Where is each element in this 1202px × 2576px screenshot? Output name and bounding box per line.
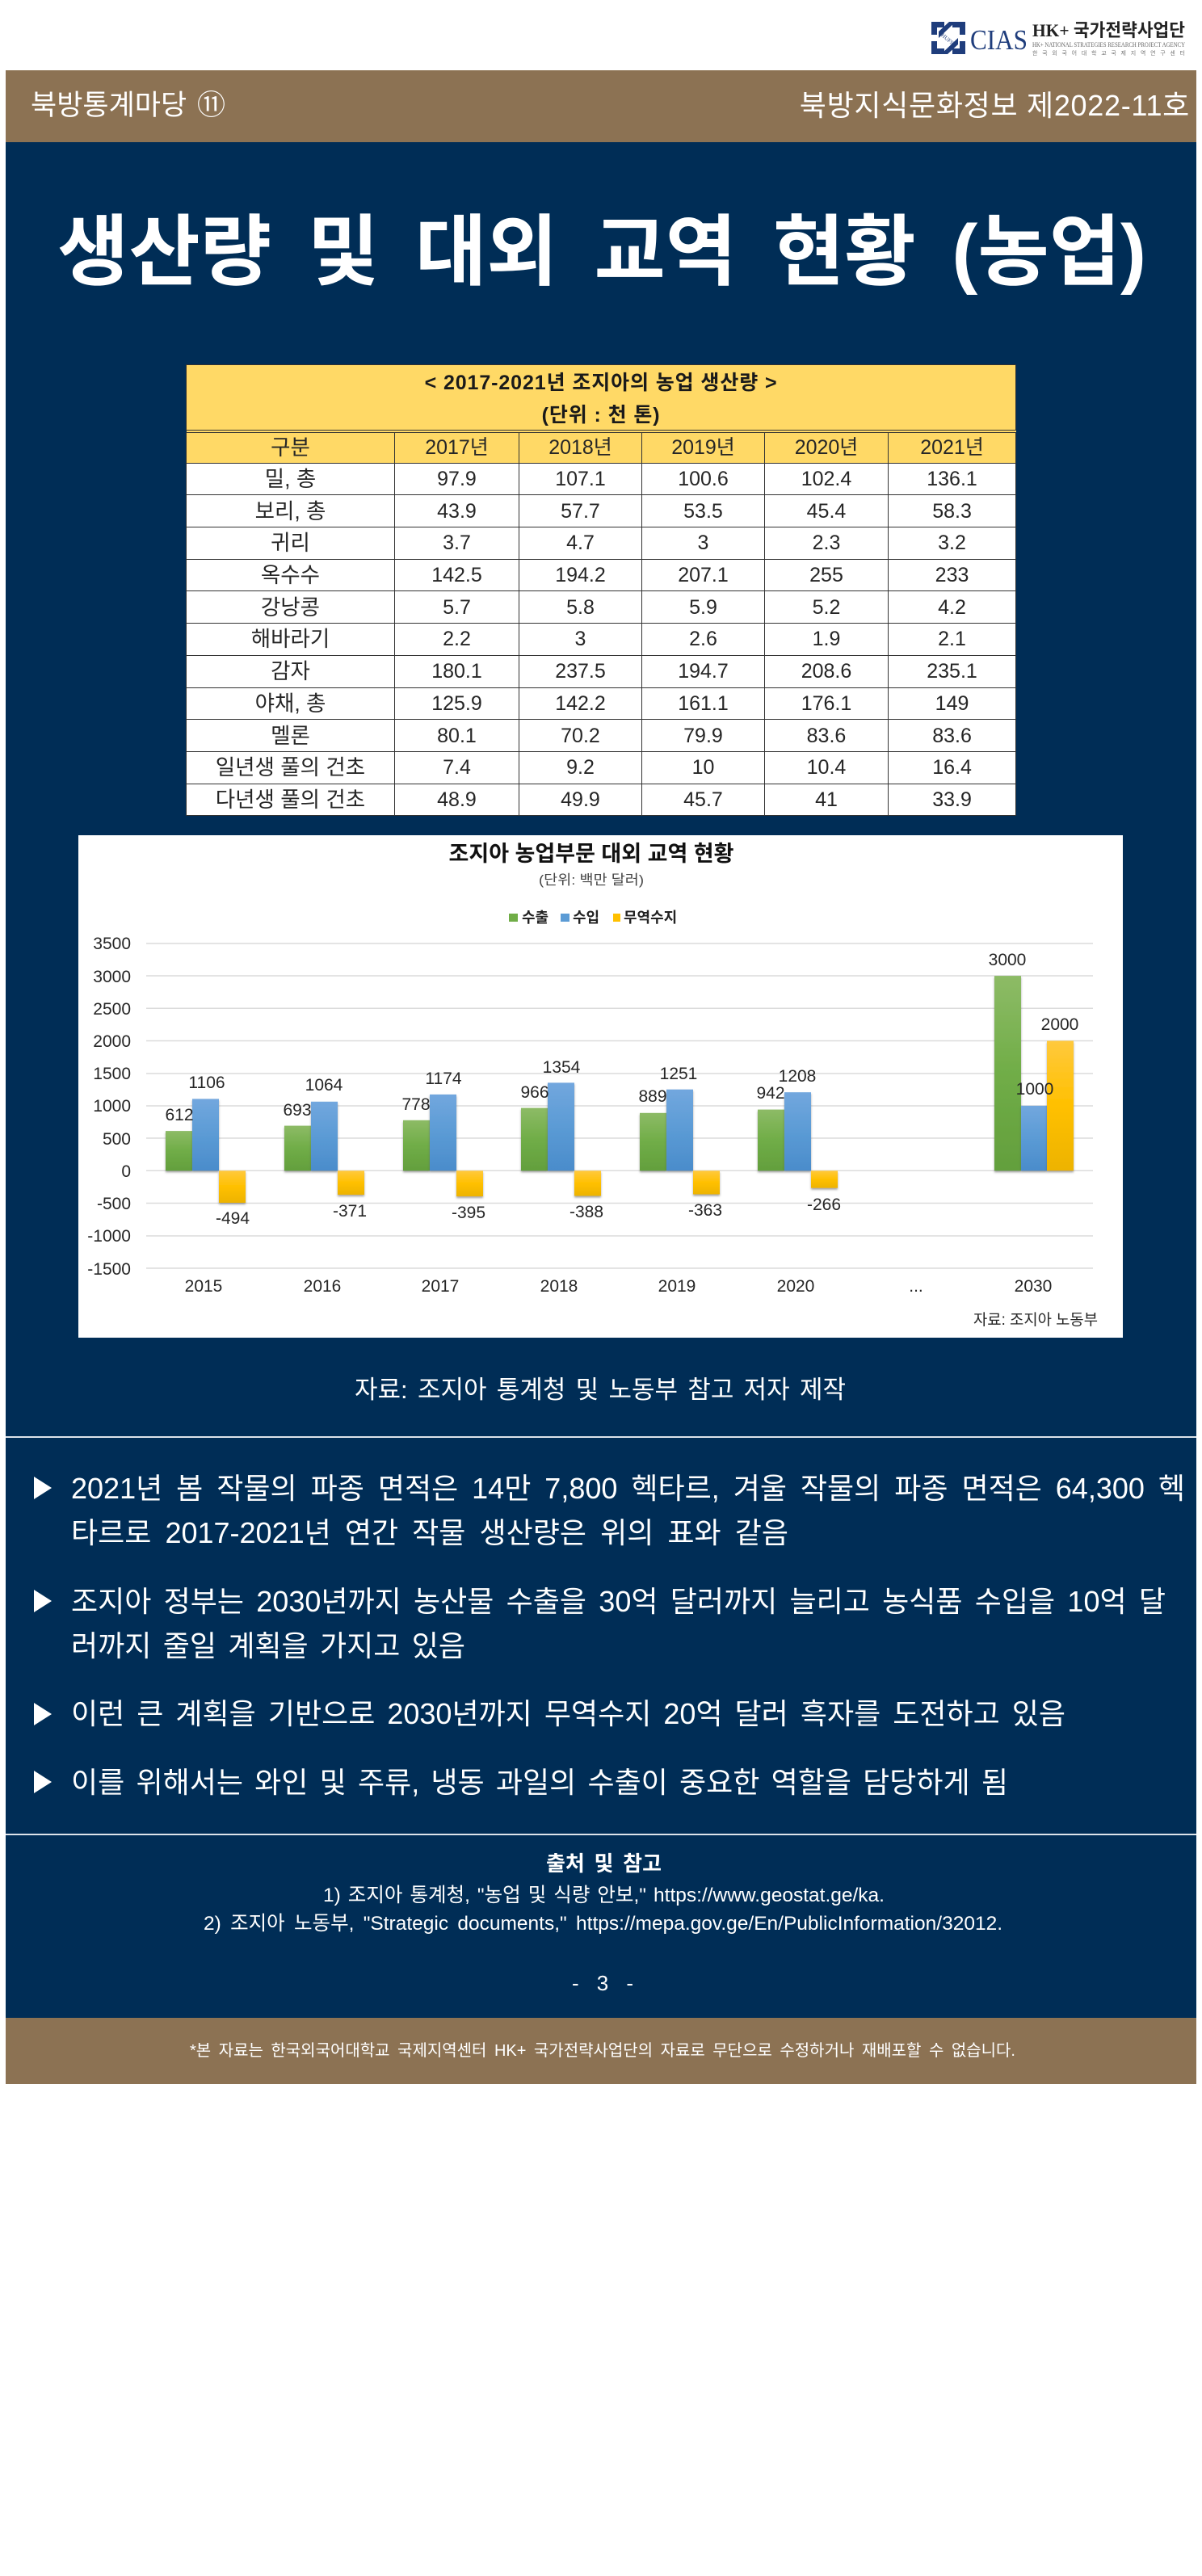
production table bbox=[186, 364, 1016, 816]
logo text: institute name: 한 국 외 국 어 대 학 교 국 제 지 역 연 구 센 터 bbox=[1032, 49, 1185, 57]
production table: 97.9 bbox=[437, 468, 477, 490]
production table: 3.7 bbox=[443, 532, 471, 554]
bullet: sowing area bbox=[34, 1472, 1185, 1549]
production table: 감자 bbox=[271, 659, 310, 683]
production table: 16.4 bbox=[932, 756, 972, 779]
bar chart: foreign trade bbox=[78, 835, 1123, 1338]
production table: 79.9 bbox=[683, 725, 723, 747]
series label: 북방통계마당 ⑪ bbox=[31, 90, 225, 121]
line 2: 러까지 줄일 계획을 가지고 있음 bbox=[71, 1629, 465, 1662]
production table: 2.2 bbox=[443, 628, 471, 650]
production table: 207.1 bbox=[678, 564, 729, 586]
source note: 자료: 조지아 통계청 및 노동부 참고 저자 제작 bbox=[355, 1376, 846, 1404]
production table: 102.4 bbox=[801, 468, 851, 490]
legend: 무역수지 bbox=[624, 910, 677, 926]
production table: 1.9 bbox=[813, 628, 840, 650]
y axis labels: -1500 bbox=[87, 1260, 131, 1279]
x axis labels: 2019 bbox=[658, 1277, 696, 1296]
data labels: -371 bbox=[333, 1202, 367, 1221]
data labels: 1064 bbox=[305, 1076, 343, 1095]
data labels: 2000 bbox=[1041, 1015, 1078, 1034]
line 1: 조지아 정부는 2030년까지 농산물 수출을 30억 달러까지 늘리고 농식품 수입을 10억 달 bbox=[71, 1585, 1166, 1618]
legend: 수입 bbox=[573, 910, 599, 926]
production table: 48.9 bbox=[437, 788, 477, 811]
production table: 233 bbox=[935, 564, 969, 586]
production table: 야채, 총 bbox=[255, 691, 326, 716]
text: 이를 위해서는 와인 및 주류, 냉동 과일의 수출이 중요한 역할을 담당하게 됨 bbox=[71, 1766, 1008, 1799]
references heading: 출처 및 참고 bbox=[546, 1851, 662, 1876]
icon: HUFS emblem bbox=[931, 22, 965, 54]
production table: 2.6 bbox=[689, 628, 717, 650]
data labels bbox=[165, 951, 1078, 1228]
production table: 53.5 bbox=[683, 500, 723, 523]
data labels: 612 bbox=[165, 1106, 194, 1124]
production table: 10.4 bbox=[807, 756, 846, 779]
y axis labels: 1500 bbox=[93, 1065, 131, 1083]
production table: 2018년 bbox=[548, 436, 612, 459]
data labels: 1354 bbox=[543, 1058, 581, 1077]
x axis labels: 2016 bbox=[304, 1277, 341, 1296]
production table: 구분 bbox=[271, 435, 310, 460]
production table: 2.3 bbox=[813, 532, 840, 554]
production table: 45.4 bbox=[807, 500, 846, 523]
production table: 보리, 총 bbox=[255, 499, 326, 523]
production table: 49.9 bbox=[561, 788, 600, 811]
production table: 235.1 bbox=[927, 660, 977, 683]
y axis labels: -500 bbox=[97, 1195, 131, 1213]
production table: 4.2 bbox=[938, 596, 966, 619]
text: 이런 큰 계획을 기반으로 2030년까지 무역수지 20억 달러 흑자를 도전하고 있음 bbox=[71, 1697, 1065, 1730]
production table: 7.4 bbox=[443, 756, 471, 779]
navy background panel bbox=[6, 142, 1196, 2018]
header band bbox=[6, 70, 1196, 142]
copyright notice: *본 자료는 한국외국어대학교 국제지역센터 HK+ 국가전략사업단의 자료로 무단으로 수정하거나 재배포할 수 없습니다. bbox=[190, 2042, 1015, 2060]
bullet: government plan bbox=[34, 1585, 1166, 1662]
data labels: 1174 bbox=[425, 1069, 462, 1088]
logo text: CIAS: CIAS bbox=[970, 24, 1028, 56]
page number: - 3 - bbox=[572, 1971, 633, 1995]
bullet arrow bbox=[34, 1477, 52, 1499]
line 2: 타르로 2017-2021년 연간 작물 생산량은 위의 표와 같음 bbox=[71, 1516, 788, 1549]
reference 2: 2) 조지아 노동부, "Strategic documents," https://mepa.gov.ge/En/PublicInformation/32012. bbox=[204, 1913, 1002, 1935]
production table: 43.9 bbox=[437, 500, 477, 523]
production table: 해바라기 bbox=[251, 627, 330, 651]
divider bbox=[6, 1834, 1196, 1835]
production table: 149 bbox=[935, 692, 969, 715]
footer band bbox=[6, 2018, 1196, 2084]
data labels: 693 bbox=[283, 1101, 312, 1120]
production table: 194.7 bbox=[678, 660, 729, 683]
production table: 옥수수 bbox=[261, 563, 320, 587]
data labels: 966 bbox=[520, 1083, 549, 1102]
y axis labels: 3500 bbox=[93, 935, 131, 953]
production table: 3 bbox=[698, 532, 708, 554]
production table: 194.2 bbox=[555, 564, 606, 586]
y axis labels: 500 bbox=[103, 1130, 131, 1149]
production table: 3 bbox=[575, 628, 586, 650]
production table: (단위 : 천 톤) bbox=[542, 404, 660, 427]
logo: CIAS HK+ bbox=[931, 20, 1185, 57]
bullet arrow bbox=[34, 1771, 52, 1793]
line 1: 2021년 봄 작물의 파종 면적은 14만 7,800 헥타르, 겨울 작물의 파종 면적은 64,300 헥 bbox=[71, 1472, 1185, 1505]
production table: 80.1 bbox=[437, 725, 477, 747]
y axis labels: 2000 bbox=[93, 1032, 131, 1051]
production table: 5.7 bbox=[443, 596, 471, 619]
data labels: 1106 bbox=[188, 1074, 225, 1092]
y axis labels: 1000 bbox=[93, 1097, 131, 1116]
bullet: wine and frozen fruit bbox=[34, 1766, 1008, 1799]
bullet arrow bbox=[34, 1703, 52, 1725]
production table: 5.8 bbox=[566, 596, 595, 619]
production table: 밀, 총 bbox=[265, 467, 316, 491]
data labels: -266 bbox=[807, 1196, 841, 1214]
production table: 176.1 bbox=[801, 692, 851, 715]
references bbox=[204, 1851, 1002, 1995]
issue number: 북방지식문화정보 제2022-11호 bbox=[800, 89, 1190, 122]
production table: 237.5 bbox=[555, 660, 606, 683]
data labels: -363 bbox=[688, 1201, 722, 1220]
data labels: 778 bbox=[401, 1095, 431, 1114]
divider bbox=[6, 1436, 1196, 1438]
data labels: 3000 bbox=[989, 951, 1026, 969]
production table: 180.1 bbox=[431, 660, 482, 683]
y axis labels: 3000 bbox=[93, 968, 131, 986]
production table: < 2017-2021년 조지아의 농업 생산량 > bbox=[425, 372, 777, 394]
y axis labels: 2500 bbox=[93, 1000, 131, 1019]
production table: 83.6 bbox=[932, 725, 972, 747]
production table: 255 bbox=[809, 564, 843, 586]
production table: 5.2 bbox=[813, 596, 840, 619]
bullet arrow bbox=[34, 1590, 52, 1612]
data labels: -494 bbox=[216, 1209, 250, 1228]
production table: 귀리 bbox=[271, 531, 310, 555]
production table: 강낭콩 bbox=[261, 595, 320, 620]
production table: 41 bbox=[815, 788, 838, 811]
production table: 다년생 풀의 건초 bbox=[216, 788, 365, 812]
production table: 멜론 bbox=[271, 724, 310, 748]
chart source: 자료: 조지아 노동부 bbox=[973, 1311, 1098, 1329]
bullet: trade surplus goal bbox=[34, 1697, 1065, 1730]
production table: 45.7 bbox=[683, 788, 723, 811]
data labels: -388 bbox=[569, 1203, 603, 1221]
x axis labels: 2020 bbox=[777, 1277, 814, 1296]
production table: 5.9 bbox=[689, 596, 717, 619]
icon: HUFS emblem: HUFS bbox=[939, 32, 955, 46]
y axis labels: -1000 bbox=[87, 1227, 131, 1246]
legend: 수출 bbox=[522, 910, 548, 926]
bars: imports bbox=[192, 1082, 1047, 1170]
chart unit: (단위: 백만 달러) bbox=[539, 872, 644, 888]
production table: 83.6 bbox=[807, 725, 846, 747]
production table: 10 bbox=[692, 756, 714, 779]
x axis labels: 2015 bbox=[185, 1277, 222, 1296]
title: 생산량 및 대외 교역 현황 (농업) bbox=[57, 209, 1146, 296]
production table: 142.2 bbox=[555, 692, 606, 715]
production table: 70.2 bbox=[561, 725, 600, 747]
production table: 107.1 bbox=[555, 468, 606, 490]
legend bbox=[509, 910, 677, 926]
chart title: 조지아 농업부문 대외 교역 현황 bbox=[449, 842, 734, 866]
production table: 57.7 bbox=[561, 500, 600, 523]
production table: 4.7 bbox=[566, 532, 595, 554]
production table: 58.3 bbox=[932, 500, 972, 523]
production table: 일년생 풀의 건초 bbox=[216, 755, 365, 780]
y axis labels bbox=[87, 935, 131, 1279]
x axis labels: 2017 bbox=[422, 1277, 459, 1296]
production table: 142.5 bbox=[431, 564, 482, 586]
production table: 125.9 bbox=[431, 692, 482, 715]
data labels: 1208 bbox=[779, 1067, 816, 1086]
production table: 9.2 bbox=[566, 756, 595, 779]
x axis labels: 2018 bbox=[540, 1277, 578, 1296]
production table: 3.2 bbox=[938, 532, 966, 554]
data labels: 889 bbox=[638, 1087, 667, 1106]
x axis labels: ... bbox=[909, 1277, 923, 1296]
data labels: 1251 bbox=[660, 1065, 697, 1083]
data labels: 942 bbox=[756, 1084, 785, 1103]
bars: exports bbox=[166, 976, 1021, 1170]
production table: 2017년 bbox=[425, 436, 489, 459]
y axis labels: 0 bbox=[121, 1162, 131, 1181]
data labels: 1000 bbox=[1016, 1080, 1053, 1099]
production table: 100.6 bbox=[678, 468, 729, 490]
production table: 2021년 bbox=[920, 436, 984, 459]
data labels: -395 bbox=[452, 1204, 485, 1222]
production table: 161.1 bbox=[678, 692, 729, 715]
production table: 208.6 bbox=[801, 660, 851, 683]
reference 1: 1) 조지아 통계청, "농업 및 식량 안보," https://www.geostat.ge/ka. bbox=[323, 1885, 885, 1906]
x axis labels bbox=[185, 1277, 1052, 1296]
bars: trade balance bbox=[219, 1040, 1074, 1203]
production table: 2020년 bbox=[795, 436, 858, 459]
production table: 2.1 bbox=[938, 628, 966, 650]
production table: 2019년 bbox=[671, 436, 735, 459]
x axis labels: 2030 bbox=[1015, 1277, 1052, 1296]
logo text: agency name: HK+ 국가전략사업단 bbox=[1032, 20, 1185, 40]
production table: 136.1 bbox=[927, 468, 977, 490]
production table: 33.9 bbox=[932, 788, 972, 811]
